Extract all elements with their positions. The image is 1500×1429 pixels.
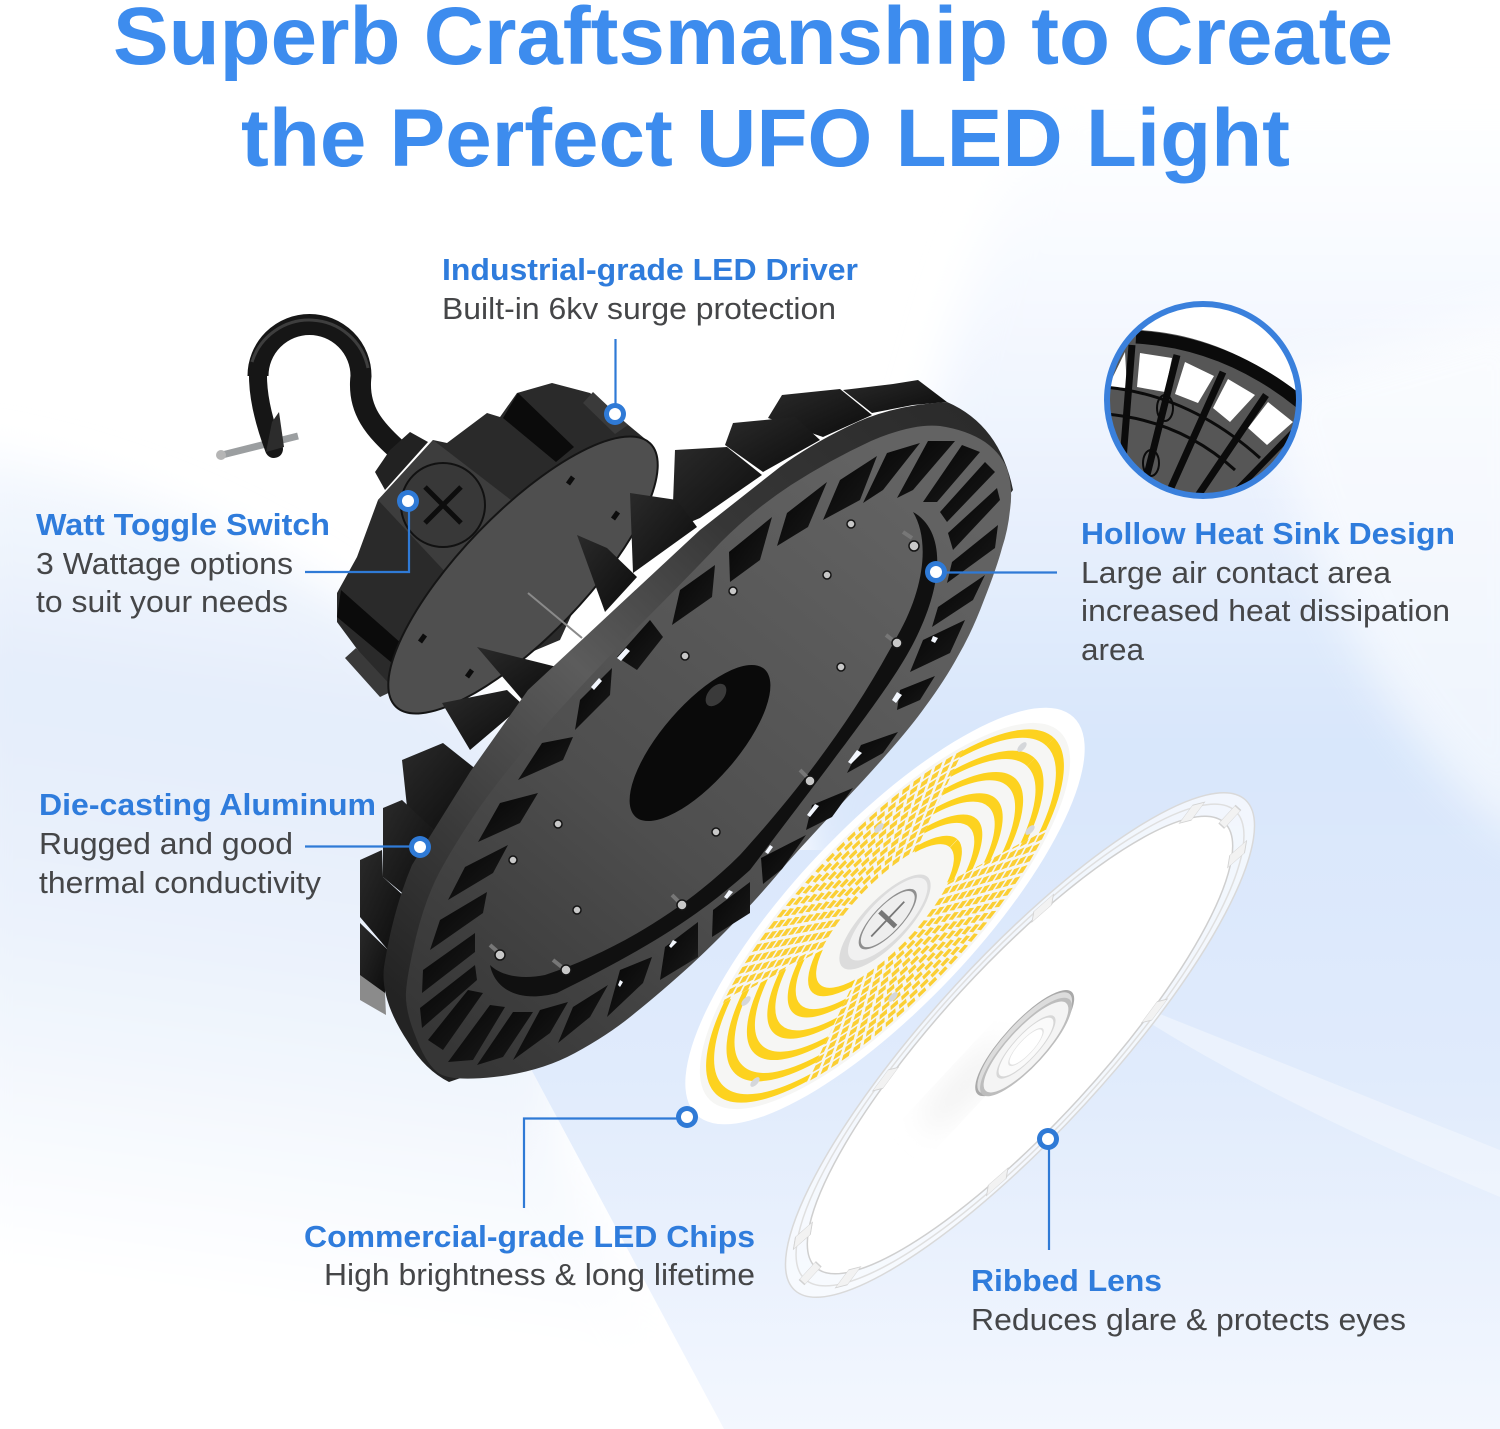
callout heading: Hollow Heat Sink Design bbox=[1081, 516, 1455, 551]
callout text: Built-in 6kv surge protection bbox=[442, 291, 836, 326]
cooling slots bbox=[420, 441, 1000, 1065]
callout marker bbox=[305, 490, 419, 572]
callout text: Large air contact area bbox=[1081, 555, 1392, 590]
inset ring bbox=[1107, 304, 1299, 496]
LED chip solid bands bbox=[662, 687, 1108, 1145]
disc face bbox=[406, 426, 1011, 1079]
callout heading: Ribbed Lens bbox=[971, 1263, 1162, 1298]
disc rim bbox=[384, 402, 1013, 1082]
callout marker bbox=[1037, 1128, 1059, 1250]
LED chip board bbox=[685, 708, 1085, 1124]
callout heading: Commercial-grade LED Chips bbox=[304, 1219, 755, 1254]
callout: hollow heat sink design bbox=[925, 516, 1455, 667]
slot highlights bbox=[591, 636, 938, 987]
ribbed lens bbox=[730, 740, 1310, 1350]
board screw holes bbox=[740, 741, 1036, 1088]
title: the Perfect UFO LED Light bbox=[241, 93, 1290, 184]
lens disc bbox=[730, 740, 1310, 1350]
callout text: 3 Wattage options bbox=[36, 546, 293, 581]
heat sink fins bbox=[360, 380, 947, 1015]
callout text bbox=[39, 826, 322, 900]
inset ribs bbox=[1105, 337, 1300, 497]
callout marker bbox=[524, 1106, 698, 1208]
center hub bbox=[826, 862, 944, 982]
callout text: increased heat dissipation bbox=[1081, 593, 1450, 628]
callout heading: Industrial-grade LED Driver bbox=[442, 252, 858, 287]
callout: ribbed lens bbox=[971, 1128, 1406, 1337]
driver hub bbox=[337, 383, 695, 750]
callout marker bbox=[925, 561, 1057, 583]
callout text: Reduces glare & protects eyes bbox=[971, 1302, 1406, 1337]
lens center shadow bbox=[914, 1032, 1016, 1138]
hub body bbox=[337, 383, 650, 707]
inset gray plate bbox=[1105, 330, 1300, 500]
inset windows bbox=[1108, 352, 1293, 445]
inset: hollow heat sink close-up bbox=[1105, 303, 1300, 500]
board disc bbox=[685, 708, 1085, 1124]
title bbox=[113, 0, 1393, 184]
callout: commercial-grade LED chips bbox=[304, 1106, 755, 1292]
callout text: to suit your needs bbox=[36, 584, 288, 619]
switch knob bbox=[401, 463, 485, 547]
callout text: area bbox=[1081, 632, 1145, 667]
callout text: thermal conductivity bbox=[39, 865, 322, 900]
callout text bbox=[36, 546, 293, 619]
LED chip dot rows bbox=[722, 750, 1048, 1082]
lens center boss bbox=[964, 979, 1087, 1108]
watt switch box bbox=[378, 440, 520, 577]
callout marker bbox=[305, 836, 431, 858]
callout text bbox=[1081, 555, 1450, 667]
lens rib tabs bbox=[743, 754, 1297, 1336]
center hole bbox=[607, 644, 793, 842]
mounting screws bbox=[490, 520, 919, 975]
LED light housing bbox=[216, 320, 1013, 1082]
callout: watt toggle switch bbox=[36, 490, 419, 619]
callout marker bbox=[604, 339, 626, 425]
callout heading: Die-casting Aluminum bbox=[39, 787, 376, 822]
hub back plate bbox=[351, 400, 695, 750]
callout text: High brightness & long lifetime bbox=[324, 1257, 755, 1292]
recessed plate edge bbox=[490, 512, 937, 996]
hook bbox=[216, 320, 428, 490]
callout heading: Watt Toggle Switch bbox=[36, 507, 330, 542]
hub tabs bbox=[345, 392, 628, 697]
callout: industrial-grade LED driver bbox=[442, 252, 858, 425]
callout text: Rugged and good bbox=[39, 826, 293, 861]
callout: die-casting aluminum bbox=[39, 787, 431, 900]
